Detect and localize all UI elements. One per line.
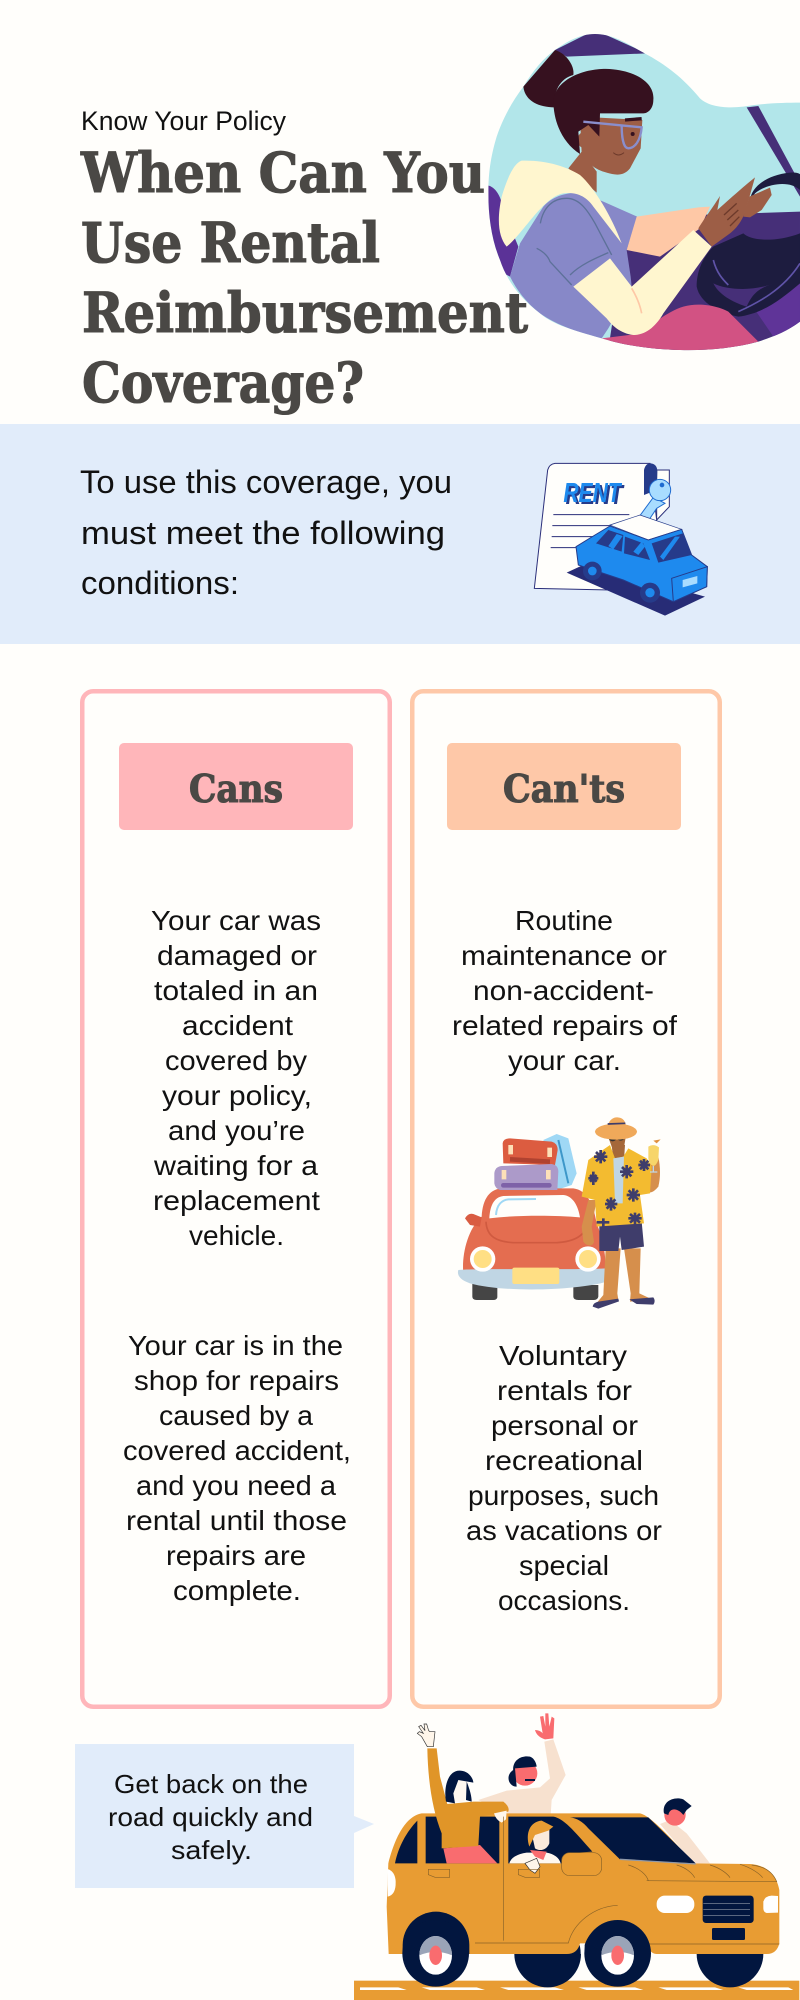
text: can'ts condition two: purposes, such xyxy=(468,1480,659,1511)
text: cans condition two: complete. xyxy=(173,1575,301,1606)
text: cans condition one: damaged or xyxy=(157,940,317,971)
text: cans condition two: Your car is in the xyxy=(128,1330,343,1361)
panel: conditions intro band xyxy=(0,424,800,644)
windows xyxy=(395,1817,696,1863)
title: Reimbursement xyxy=(82,280,529,345)
title: Coverage? xyxy=(82,350,364,415)
road xyxy=(354,1981,799,2000)
text: cans condition one: and you’re xyxy=(168,1115,305,1146)
panel: cans xyxy=(82,691,390,1707)
driver xyxy=(509,1821,561,1873)
text: cans condition one: Your car was xyxy=(151,905,321,936)
callout: get back on the road xyxy=(75,1744,374,1888)
text: cans condition two: caused by a xyxy=(159,1400,313,1431)
text: cans condition one xyxy=(151,905,321,1251)
man waving xyxy=(478,1713,566,1815)
traveller figure xyxy=(582,1117,661,1309)
intro text: must meet the following xyxy=(81,515,445,551)
text: cans condition one: vehicle. xyxy=(189,1220,284,1251)
intro text: To use this coverage, you xyxy=(80,464,452,500)
text: can'ts condition one xyxy=(452,905,677,1076)
text: cans condition two xyxy=(123,1330,351,1606)
text: can'ts condition two: special xyxy=(519,1550,609,1581)
front wheels xyxy=(402,1912,651,1987)
text: cans condition one: waiting for a xyxy=(153,1150,318,1181)
text: cans condition one: replacement xyxy=(153,1185,320,1216)
illustration: friends in orange car xyxy=(354,1713,799,2000)
intro text: conditions: xyxy=(81,565,239,601)
callout: get back on the road: road quickly and xyxy=(108,1802,313,1832)
text: can'ts condition two xyxy=(466,1340,662,1616)
text: can'ts condition one: related repairs of xyxy=(452,1010,677,1041)
text: can'ts condition one: non-accident- xyxy=(473,975,654,1006)
callout: get back on the road: safely. xyxy=(171,1835,252,1865)
text: can'ts condition two: occasions. xyxy=(498,1585,630,1616)
text: can'ts condition two: rentals for xyxy=(497,1375,632,1406)
text: can'ts condition one: maintenance or xyxy=(461,940,667,971)
heading: Cans: Cans xyxy=(189,766,283,811)
text: cans condition one: covered by xyxy=(165,1045,307,1076)
text: cans condition two: repairs are xyxy=(166,1540,306,1571)
panel: can'ts xyxy=(412,691,720,1707)
illustration: traveller with car and luggage xyxy=(458,1117,661,1309)
wheels xyxy=(567,1945,581,1954)
text: cans condition one: totaled in an xyxy=(154,975,318,1006)
callout: get back on the road: Get back on the xyxy=(114,1769,308,1799)
icon: rental document with car and key xyxy=(534,463,707,616)
text: can'ts condition two: recreational xyxy=(485,1445,643,1476)
text: can'ts condition two: as vacations or xyxy=(466,1515,662,1546)
woman waving xyxy=(417,1724,509,1863)
text: can'ts condition two: Voluntary xyxy=(499,1340,627,1371)
text: can'ts condition one: Routine xyxy=(515,905,613,936)
text: can'ts condition one: your car. xyxy=(508,1045,621,1076)
subtitle: Know Your Policy: Know Your Policy xyxy=(81,106,286,136)
text: cans condition one: your policy, xyxy=(162,1080,312,1111)
text: cans condition two: covered accident, xyxy=(123,1435,351,1466)
heading: Cans xyxy=(119,743,353,830)
text: cans condition two: rental until those xyxy=(126,1505,347,1536)
heading: Can'ts: Can'ts xyxy=(503,766,625,811)
title: When Can You xyxy=(80,140,485,205)
text: cans condition two: shop for repairs xyxy=(134,1365,339,1396)
text: can'ts condition two: personal or xyxy=(491,1410,638,1441)
passenger at far side xyxy=(660,1798,710,1863)
text: cans condition two: and you need a xyxy=(136,1470,336,1501)
mirror and details xyxy=(562,1853,602,1876)
title: Use Rental xyxy=(81,210,380,275)
intro text xyxy=(80,464,452,601)
car body xyxy=(387,1813,779,1954)
title xyxy=(80,140,529,415)
icon: rental document with car and key: RENT xyxy=(566,479,625,510)
icon: rental document with car and key: RENT xyxy=(563,477,622,508)
illustration: woman driving xyxy=(480,20,800,360)
text: cans condition one: accident xyxy=(182,1010,293,1041)
heading: Can'ts xyxy=(447,743,681,830)
